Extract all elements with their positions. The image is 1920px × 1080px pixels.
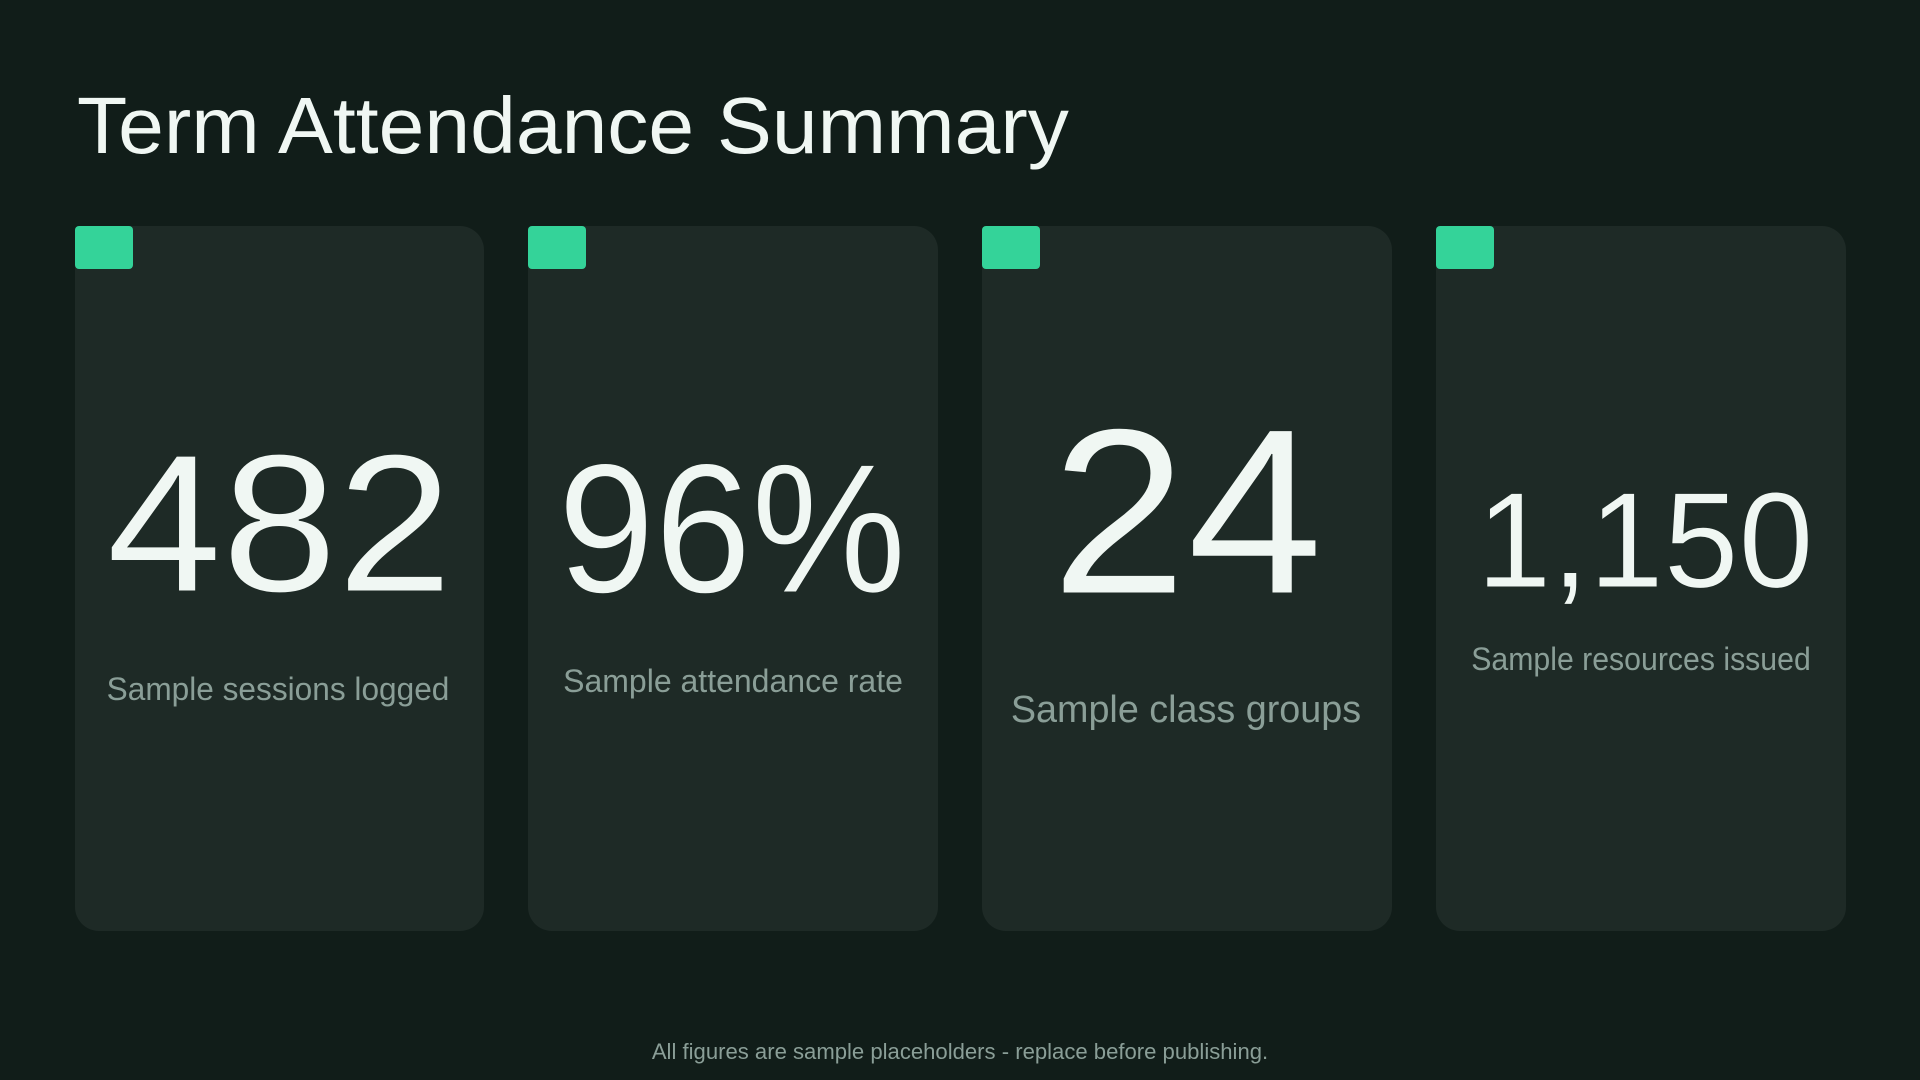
stat label: Sample sessions logged bbox=[107, 670, 449, 706]
stat label: Sample attendance rate bbox=[563, 663, 903, 699]
stat value: 96% bbox=[558, 425, 906, 631]
panel: attendance rate bbox=[528, 226, 938, 931]
accent tag bbox=[1436, 226, 1494, 269]
footnote: All figures are sample placeholders - replace before publishing. bbox=[652, 1039, 1268, 1064]
accent tag bbox=[75, 226, 133, 269]
accent tag bbox=[528, 226, 586, 269]
stat value: 1,150 bbox=[1476, 464, 1813, 616]
stat value: 24 bbox=[1051, 380, 1323, 644]
panel: resources issued bbox=[1436, 226, 1846, 931]
stat label: Sample class groups bbox=[1011, 689, 1361, 731]
title: Term Attendance Summary bbox=[77, 81, 1069, 170]
stat value: 482 bbox=[107, 414, 452, 633]
panel: class groups bbox=[982, 226, 1392, 931]
accent tag bbox=[982, 226, 1040, 269]
panel: sessions logged bbox=[75, 226, 484, 931]
stat label: Sample resources issued bbox=[1471, 641, 1810, 677]
